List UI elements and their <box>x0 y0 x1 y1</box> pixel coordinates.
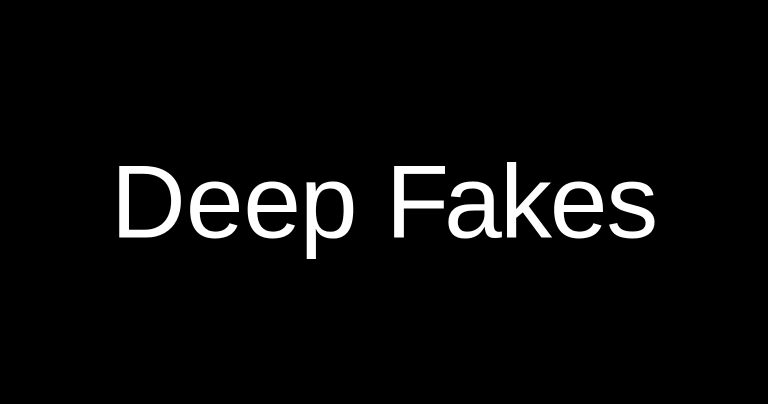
title: Deep Fakes <box>111 144 658 260</box>
